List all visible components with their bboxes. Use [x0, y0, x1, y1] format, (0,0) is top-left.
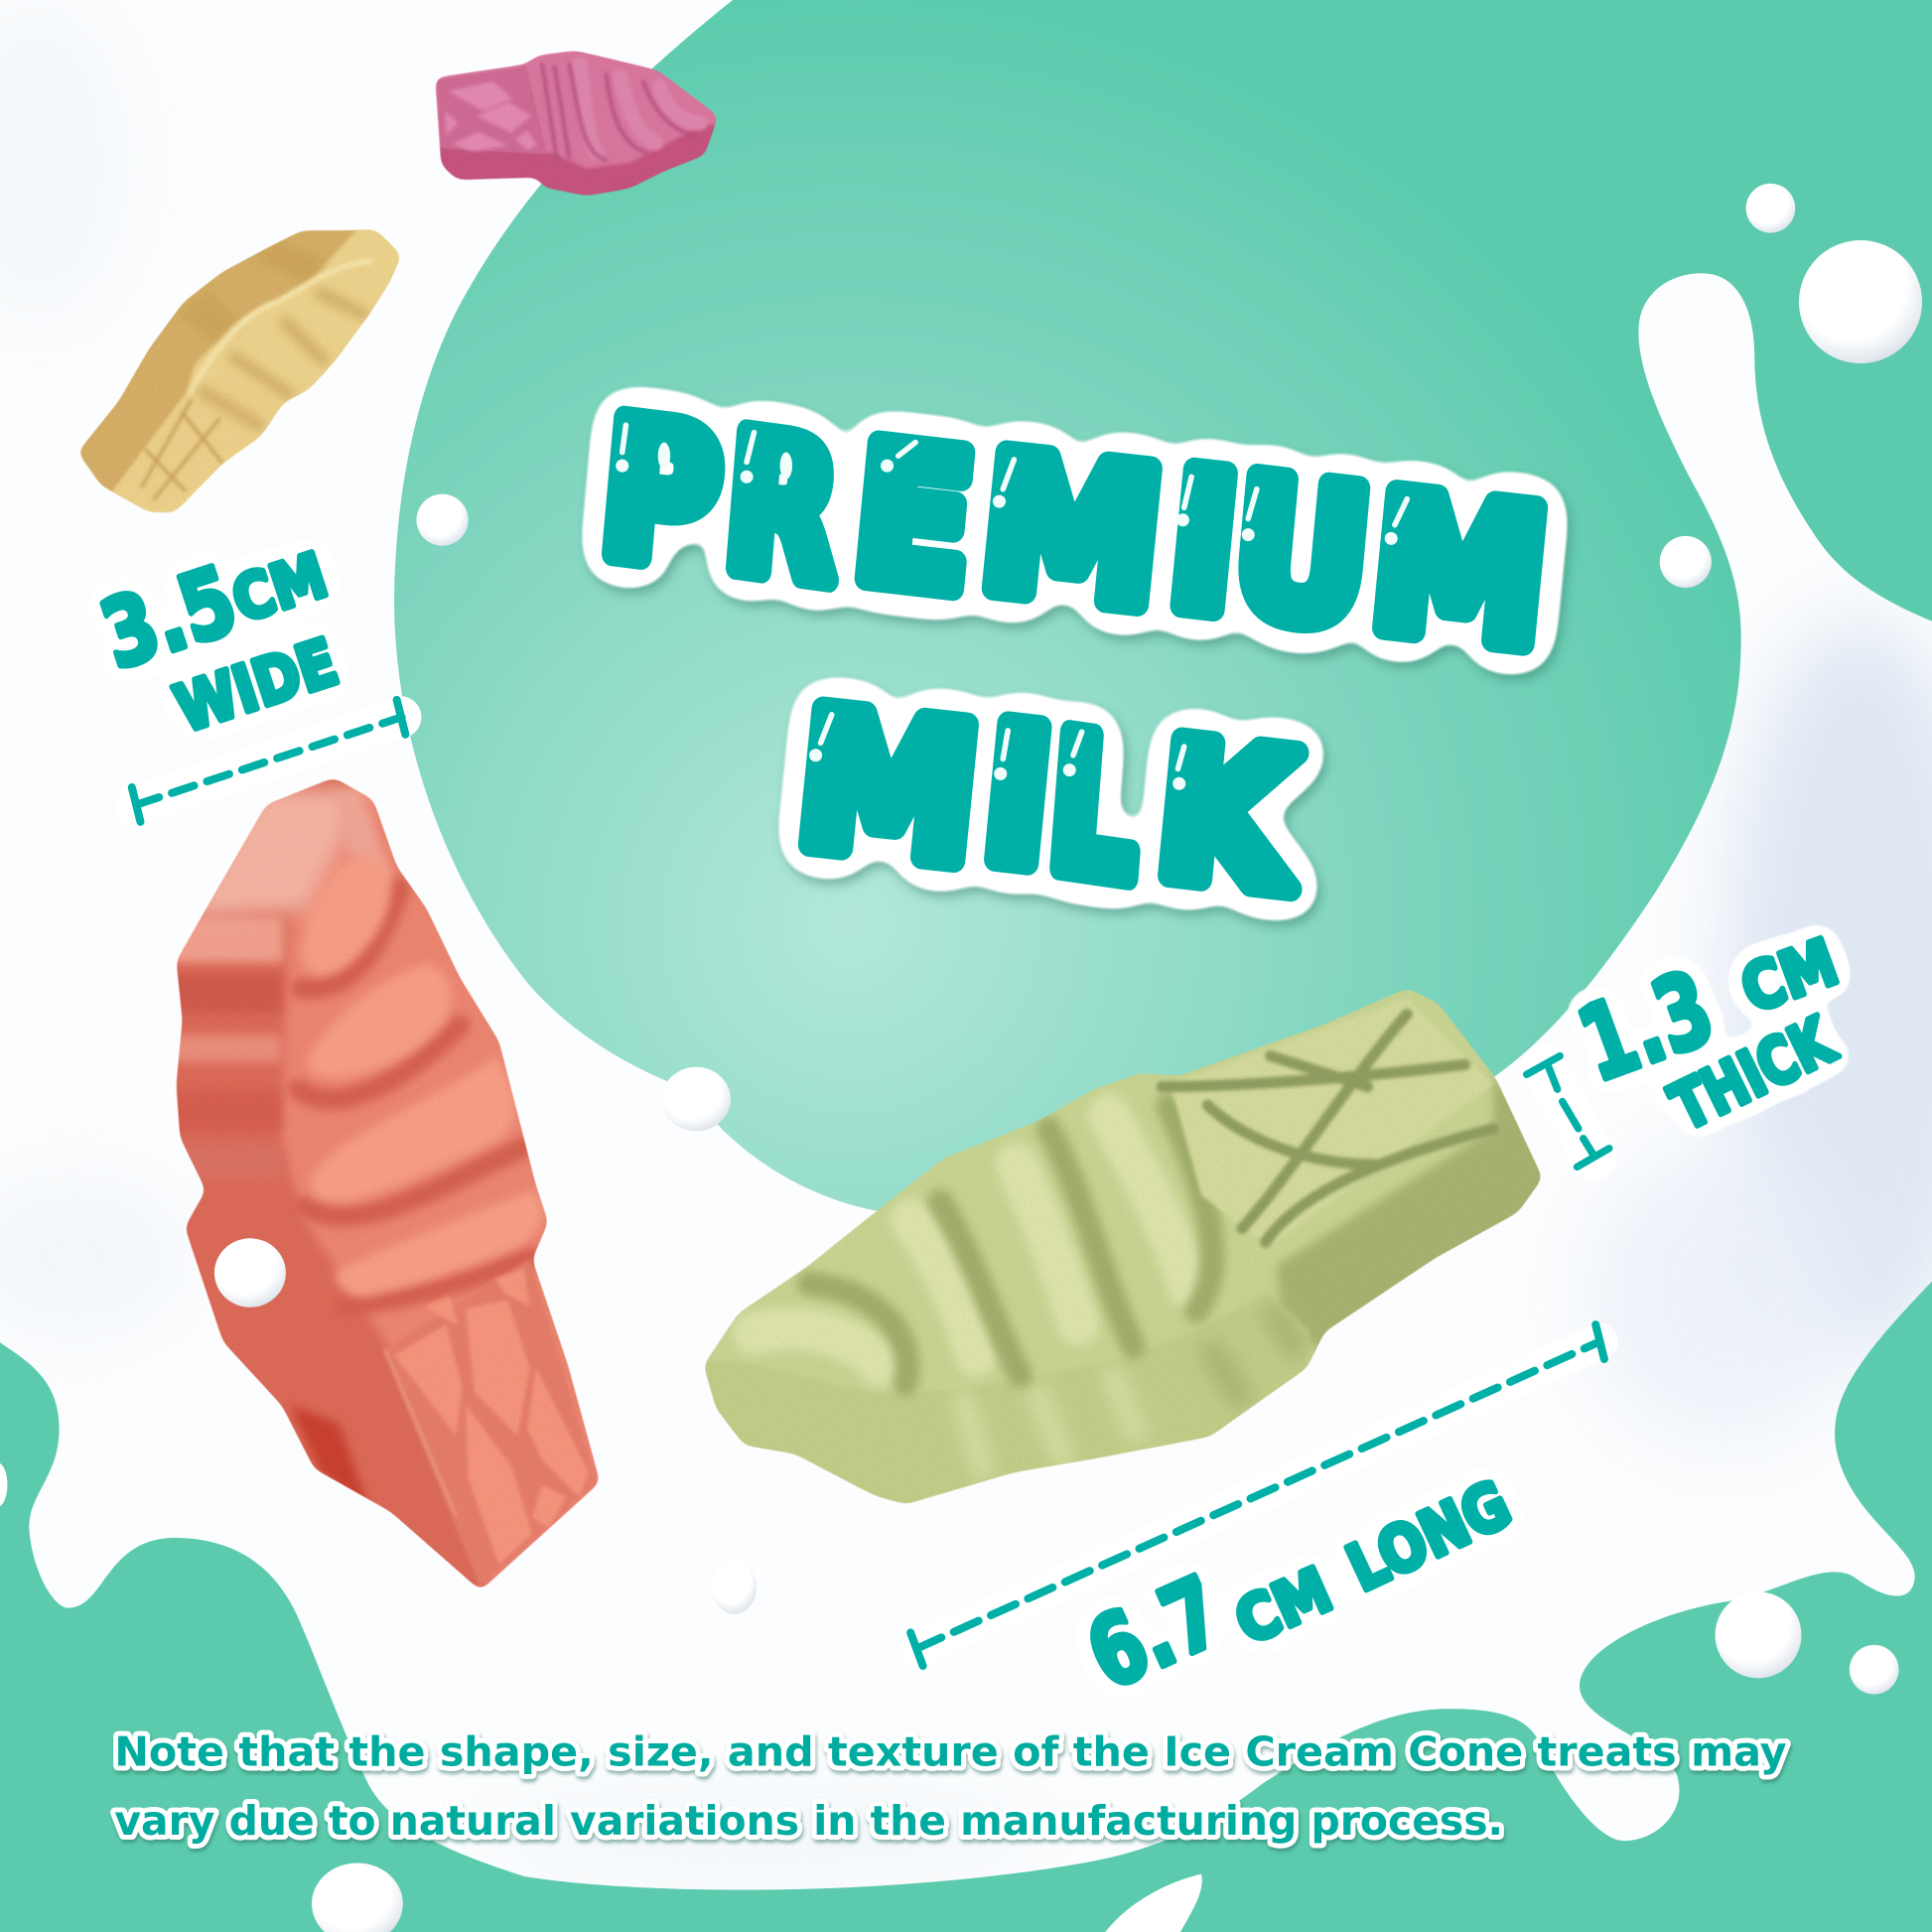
title word: premium: I: [1161, 432, 1247, 655]
pink ice cream cone treat: [435, 51, 717, 196]
footnote text: vary due to natural variations in the manufacturing process.: [114, 1797, 1503, 1845]
length measurement: 6.7 cm long: 6.7: [1071, 1556, 1238, 1712]
thickness measurement: 1.3 cm thick: [1527, 925, 1847, 1167]
title word: milk: [789, 671, 1309, 932]
width measurement: 3.5 cm wide: 3.5: [89, 547, 249, 691]
title: premium milk: [593, 380, 1558, 932]
cone of red treat: [384, 1259, 597, 1587]
cone of green treat: [1162, 998, 1493, 1247]
mint central circle and top-right panel: [394, 0, 1932, 1217]
title word: premium: P: [593, 380, 731, 609]
title word: milk: I: [975, 686, 1061, 908]
length measurement: 6.7 cm long: CM: [1225, 1554, 1341, 1658]
red ice cream cone treat: [176, 778, 599, 1587]
title word: milk: K: [1149, 702, 1309, 932]
title word: milk: L: [1041, 694, 1151, 919]
milk bubble on red treat: [214, 1238, 286, 1308]
title word: premium: M: [972, 415, 1172, 649]
title word: premium: [593, 380, 1558, 688]
title word: premium: R: [718, 394, 851, 621]
width measurement: 3.5 cm wide: [89, 539, 405, 822]
side ripples: [961, 1368, 1140, 1478]
title word: premium: M: [1363, 454, 1558, 688]
title word: milk: M: [789, 671, 988, 905]
side of red treat: [160, 763, 492, 1601]
title word: premium: E: [846, 405, 984, 633]
thickness measurement: 1.3 cm thick: 1.3: [1565, 949, 1728, 1105]
width measurement: 3.5 cm wide: WIDE: [167, 625, 346, 747]
width measurement: 3.5 cm wide: CM: [224, 539, 336, 636]
length measurement: 6.7 cm long: [910, 1324, 1604, 1712]
title highlights: [619, 425, 1407, 787]
thickness measurement: 1.3 cm thick: CM: [1732, 925, 1847, 1028]
green ice cream cone treat: [705, 989, 1541, 1504]
yellow ice cream cone treat: [79, 228, 399, 513]
mint bottom panel: [0, 1220, 1932, 1932]
footnote text: [114, 1727, 1787, 1845]
length measurement: 6.7 cm long: LONG: [1336, 1467, 1522, 1606]
footnote text: Note that the shape, size, and texture of the Ice Cream Cone treats may: [114, 1727, 1787, 1775]
title word: premium: U: [1225, 438, 1380, 668]
thickness measurement: 1.3 cm thick: THICK: [1659, 1002, 1847, 1145]
